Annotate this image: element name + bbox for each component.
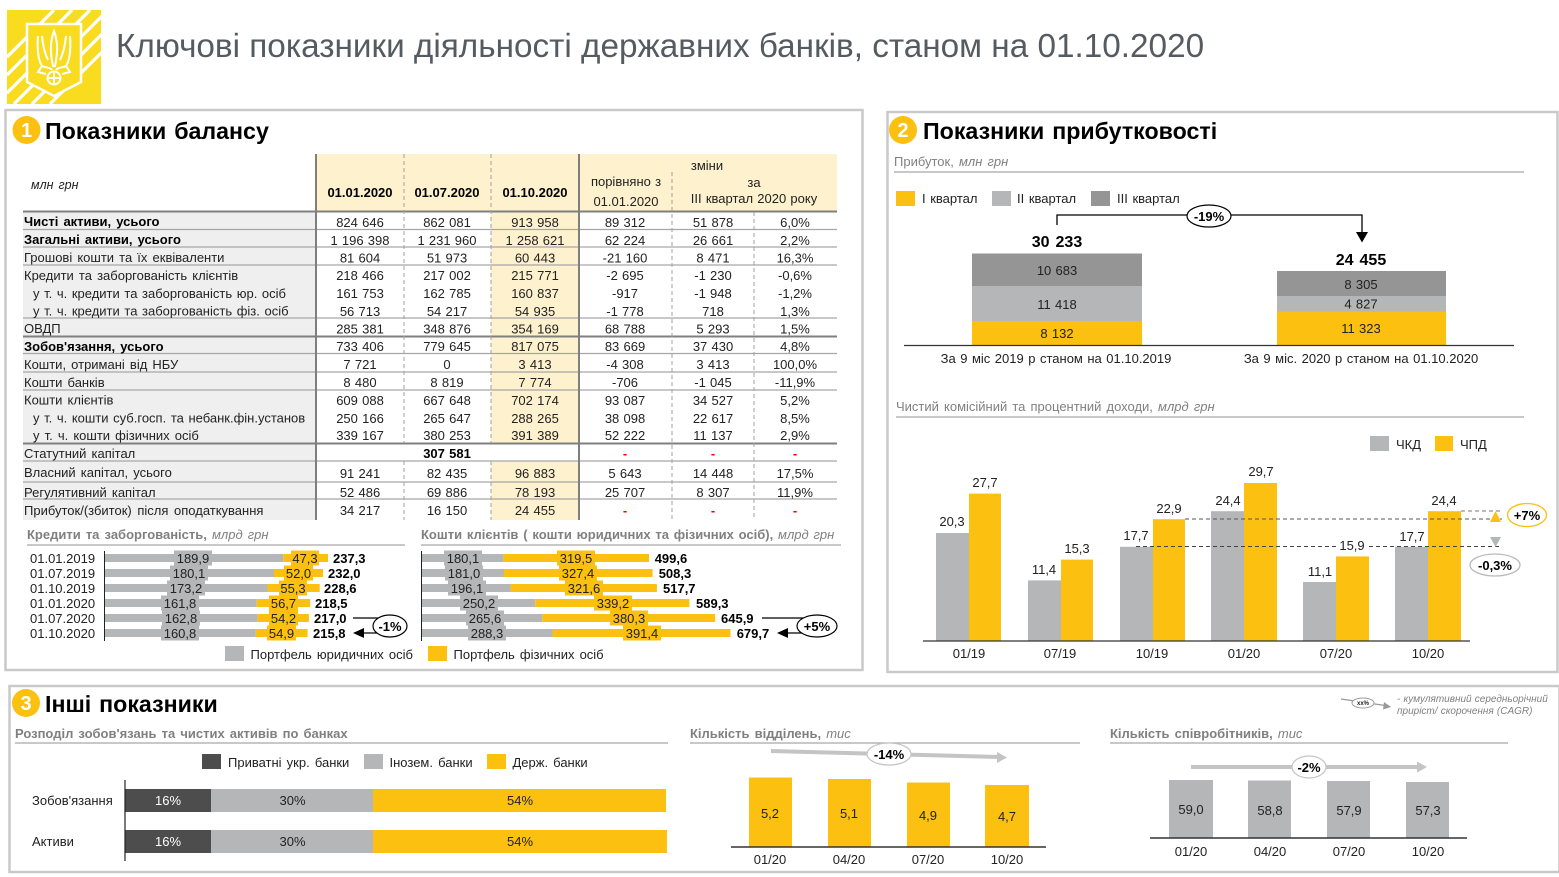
chart: loans bars: 54,2 [271,611,296,626]
chart: employees: 57,3 [1415,803,1441,818]
row: NBU funds: 0 [443,357,451,372]
row: cash: -21 160 [603,250,647,266]
chart: branches: 5,2 [761,806,779,821]
chart: loans bars: 218,5 [315,596,348,611]
row: government bonds: ОВДП [24,321,61,336]
row: net profit: - [793,503,797,518]
row: equity: 82 435 [427,466,467,481]
chart: branches [690,726,1080,867]
row: total assets: 62 224 [605,233,645,248]
axis labels: profit periods: За 9 міс 2019 р станом на 01.10.2019 [941,351,1171,366]
legend: income [1370,436,1487,452]
table header: 01.10.2020 [502,185,568,200]
arrow: -2% [1191,756,1427,778]
row: client funds: 34 527 [693,393,733,408]
row: net profit: 34 217 [340,503,380,518]
row: total assets: 26 661 [693,233,733,248]
row: net assets: 51 878 [693,215,733,230]
row: total assets: 1 258 621 [505,233,565,248]
chart: loans bars: 01.10.2020 [30,626,95,641]
row: business funds: 8,5% [780,411,810,426]
chart: employees: 07/20 [1333,844,1365,859]
chart: loans bars: 161,8 [164,596,196,611]
chart: loans bars: 01.01.2020 [30,596,95,611]
legend: portfolios [225,646,604,662]
row: net profit: - [711,503,715,518]
row: government bonds: 348 876 [423,322,471,336]
chart: distribution by banks: 54% [507,793,533,808]
row: NBU funds: -4 308 [606,357,644,372]
note: CAGR: xx% [1357,701,1370,707]
chart: distribution by banks: 16% [155,793,181,808]
row: bank funds: 8 819 [430,375,464,390]
row: equity: 5 643 [608,466,642,481]
chart: client funds bars: 319,5 [560,551,592,566]
chart: loans bars: 189,9 [177,551,209,566]
row: equity [24,465,814,481]
stacked bar: 2019 profit: 10 683 [1037,263,1077,278]
row: individual funds [33,428,810,443]
row: total assets: 2,2% [780,233,810,248]
row: liabilities: 37 430 [693,339,733,354]
table header: порівняно з [591,174,661,189]
row: NBU funds: Кошти, отримані від НБУ [24,357,179,372]
legend: quarters: І квартал [922,191,977,206]
row: individual funds: 52 222 [605,428,645,443]
callout: +7%: +7% [1514,508,1541,523]
row: regulatory capital: 11,9% [777,485,813,500]
chart: branches: 01/20 [754,852,786,867]
row: total assets [24,232,810,248]
row: charter capital: - [793,446,797,461]
row: corporate loans: -917 [612,286,638,301]
chart: loans bars: 01.01.2019 [30,551,95,566]
row: bank funds: -11,9% [775,375,816,390]
row: cash: 16,3% [777,250,814,266]
arrow: -14% [771,743,1007,765]
row: liabilities [24,339,810,354]
chart: loans bars: 228,6 [324,581,357,596]
row: liabilities: 817 075 [511,339,559,354]
chart: branches: 10/20 [991,852,1023,867]
chart: loans bars: 232,0 [328,566,361,581]
bar chart: income: 29,7 [1248,464,1274,479]
bar chart: income: 15,3 [1064,541,1090,556]
chart: client funds bars: 679,7 [737,626,769,641]
heading: balance indicators: 1 [21,120,32,142]
row: loans: -0,6% [778,268,812,283]
row: charter capital: - [623,446,627,461]
row: bank funds: 7 774 [518,375,552,390]
stacked bar: 2020 profit: 8 305 [1344,277,1378,292]
row: individual funds: у т. ч. кошти фізичних осіб [33,428,199,443]
row: individual funds: 339 167 [336,428,384,443]
bar chart: income: 01/20 [1228,646,1260,661]
stacked bar: 2020 profit: 24 455 [1336,252,1386,269]
bar chart: income: 10/19 [1136,646,1168,661]
legend: bank types [202,754,588,770]
row: bank funds: 8 480 [343,375,377,390]
row: bank funds: Кошти банків [24,375,105,390]
row: charter capital: Статутний капітал [24,446,135,461]
legend: bank types: Інозем. банки [390,755,473,770]
stacked bar: 2019 profit [972,234,1142,346]
row: corporate loans: 162 785 [423,286,471,301]
row: retail loans: 54 217 [427,304,467,319]
chart: loans bars: 56,7 [271,596,296,611]
chart: client funds bars: 321,6 [568,581,600,596]
chart: employees: Кількість співробітників, тис [1110,726,1303,741]
chart: distribution by banks: Розподіл зобов'язань та чистих активів по банках [15,726,348,741]
row: individual funds: 11 137 [693,428,733,443]
row: corporate loans: -1 948 [694,286,732,301]
bar chart: income: 01/19 [953,646,985,661]
row: liabilities: 83 669 [605,339,645,354]
stacked bar: 2019 profit: 11 418 [1037,297,1077,312]
callout: +5% arrow [762,615,837,638]
row: net profit: 16 150 [427,503,467,518]
row: loans [24,268,812,283]
bar chart: income: 17,7 [1399,529,1425,544]
row: regulatory capital: 25 707 [605,485,645,500]
row: business funds: 288 265 [511,411,559,426]
row: loans: -2 695 [606,268,644,283]
row: corporate loans: у т. ч. кредити та заборгованість юр. осіб [33,286,286,301]
bar chart: income: 10/20 [1412,646,1444,661]
axis labels: profit periods [941,351,1478,366]
row: cash: 8 471 [696,250,730,266]
chart: distribution by banks: 16% [155,834,181,849]
bar chart: income [923,464,1470,661]
heading: profitability: Показники прибутковості [923,118,1217,144]
chart: client funds bars [421,527,841,641]
legend: income: ЧКД [1396,437,1421,452]
row: loans: -1 230 [694,268,732,283]
chart: client funds bars: 196,1 [451,581,483,596]
legend: portfolios: Портфель фізичних осіб [454,647,604,662]
row: NBU funds [24,357,817,372]
chart: employees: 57,9 [1336,803,1362,818]
note: CAGR [1341,694,1548,717]
bar chart: income: 22,9 [1156,501,1182,516]
heading: profitability: 2 [897,120,909,142]
row: total assets: 1 231 960 [417,233,477,248]
row: client funds: Кошти клієнтів [24,392,114,408]
callout: +5% arrow: +5% [804,619,831,634]
bar chart: income: 11,4 [1032,562,1056,577]
row: regulatory capital [24,485,813,500]
row: retail loans [33,304,810,319]
heading: other indicators: Інші показники [45,691,218,717]
row: individual funds: 2,9% [780,428,810,443]
bar chart: income: 20,3 [939,514,965,529]
stacked bar: 2020 profit [1277,252,1446,346]
arrow: -19% profit change: -19% [1194,209,1225,224]
row: government bonds: 354 169 [511,322,559,336]
chart: loans bars: 162,8 [165,611,197,626]
row: retail loans: 56 713 [340,304,380,319]
chart: client funds bars: 517,7 [663,581,696,596]
table header: за [747,175,761,190]
chart: branches: 5,1 [840,806,858,821]
logo: trident emblem [7,10,108,104]
row: net profit: - [623,503,627,518]
panel: other indicators [10,686,1559,872]
chart: loans bars: 215,8 [313,626,346,641]
chart: client funds bars: 180,1 [447,551,479,566]
heading: balance indicators: Показники балансу [45,118,269,144]
callout: -1% arrow [353,615,407,638]
callout: -0,3%: -0,3% [1478,558,1512,573]
bar chart: income: 27,7 [972,475,998,490]
row: government bonds: 1,5% [780,322,810,336]
row: corporate loans: -1,2% [778,286,812,301]
row: equity: 14 448 [693,466,733,481]
row: NBU funds: 100,0% [773,357,817,372]
row: individual funds: 380 253 [423,428,471,443]
row: business funds: 250 166 [336,411,384,426]
row: retail loans: 54 935 [515,304,555,319]
chart: client funds bars: 181,0 [448,566,480,581]
table header: 01.01.2020 [593,194,659,209]
reference lines [1136,511,1502,546]
chart: loans bars: 01.07.2019 [30,566,95,581]
row: liabilities: 733 406 [336,339,384,354]
chart: loans bars: 47,3 [292,551,318,566]
row: liabilities: 779 645 [423,339,471,354]
row: total assets: 1 196 398 [330,233,390,248]
row: equity: 91 241 [340,466,380,481]
row: net assets: 89 312 [605,215,645,230]
chart: branches: Кількість відділень, тис [690,726,851,741]
panel: profitability [888,112,1558,672]
chart: employees: 01/20 [1175,844,1207,859]
row: equity: Власний капітал, усього [24,465,172,480]
row: cash: Грошові кошти та їх еквіваленти [24,250,224,265]
row: regulatory capital: 69 886 [427,485,467,500]
row: cash: 60 443 [515,250,555,266]
row: cash: 81 604 [340,250,380,266]
stacked bar: 2020 profit: 11 323 [1341,321,1381,336]
row: net profit: 24 455 [515,503,555,518]
row: loans: 215 771 [511,268,559,283]
row: NBU funds: 7 721 [343,357,377,372]
chart: loans bars [27,527,407,641]
panel: balance indicators [6,110,862,670]
chart: client funds bars: 391,4 [626,626,658,641]
bar chart: income: 17,7 [1123,528,1149,543]
callout: -0,3% [1470,537,1520,576]
table header: 01.07.2020 [414,185,480,200]
row: business funds [33,410,810,426]
chart: client funds bars: 380,3 [613,611,645,626]
row: NBU funds: 3 413 [696,357,730,372]
row: client funds [24,392,810,408]
stacked bar: 2019 profit: 30 233 [1032,234,1082,251]
chart: employees: 10/20 [1412,844,1444,859]
note: CAGR: приріст/ скорочення (CAGR) [1397,706,1532,717]
title: Ключові показники діяльності державних банків, станом на 01.10.2020 [116,28,1204,65]
chart: loans bars: 52,0 [286,566,311,581]
chart: client funds bars: 250,2 [463,596,495,611]
row: net assets: 862 081 [423,215,471,230]
row: client funds: 5,2% [780,393,810,408]
subheading: fee and interest income: Чистий комісійний та процентний доходи, млрд грн [896,399,1215,414]
chart: client funds bars: Кошти клієнтів ( кошти юридичних та фізичних осіб), млрд грн [421,527,834,542]
row: government bonds: 285 381 [336,322,384,336]
row: bank funds: -1 045 [694,375,732,390]
bar chart: income: 07/19 [1044,646,1076,661]
row: individual funds: 391 389 [511,428,559,443]
arrow: -2%: -2% [1297,760,1321,775]
legend: portfolios: Портфель юридичних осіб [250,647,413,662]
bar chart: income: 24,4 [1215,493,1241,508]
chart: branches: 07/20 [912,852,944,867]
chart: loans bars: 173,2 [170,581,202,596]
row: charter capital [24,446,797,461]
chart: loans bars: 160,8 [164,626,196,641]
arrow: -14%: -14% [874,747,905,762]
row: client funds: 93 087 [605,393,645,408]
table header [31,158,818,209]
row: net assets: Чисті активи, усього [24,214,160,229]
row: cash [24,250,814,266]
row: bank funds [24,375,816,390]
row: net assets [24,214,810,230]
row: government bonds [24,321,810,336]
row: total assets: Загальні активи, усього [24,232,181,247]
chart: distribution by banks: Активи [32,834,74,849]
chart: loans bars: Кредити та заборгованість, млрд грн [27,527,269,542]
row: corporate loans: 160 837 [511,286,559,301]
legend: income: ЧПД [1460,437,1487,452]
legend: quarters: ІІ квартал [1017,191,1076,206]
table header: млн грн [31,178,79,192]
row: corporate loans [33,286,812,301]
table header: 01.01.2020 [327,185,393,200]
row: business funds: у т. ч. кошти суб.госп. та небанк.фін.установ [33,410,305,426]
chart: distribution by banks: 30% [279,834,306,849]
chart: branches: 4,9 [919,808,937,823]
row: charter capital: 307 581 [423,446,471,461]
chart: distribution by banks: 54% [507,834,533,849]
row: retail loans: 718 [702,304,724,319]
legend: bank types: Держ. банки [512,755,588,770]
row: regulatory capital: 8 307 [696,485,730,500]
chart: loans bars: 55,3 [280,581,306,596]
bar chart: income: 07/20 [1320,646,1352,661]
row: loans: 218 466 [336,268,384,283]
row: loans: 217 002 [423,268,471,283]
row: NBU funds: 3 413 [518,357,552,372]
callout: -1% arrow: -1% [378,619,402,634]
row: retail loans: -1 778 [606,304,644,319]
stacked bar: 2019 profit: 8 132 [1040,326,1074,341]
chart: client funds bars: 339,2 [597,596,629,611]
chart: client funds bars: 508,3 [659,566,691,581]
row: net profit: Прибуток/(збиток) після оподаткування [24,503,263,518]
row: liabilities: 4,8% [780,339,810,354]
row: net profit [24,503,797,518]
row: business funds: 38 098 [605,411,645,426]
row: cash: 51 973 [427,250,467,266]
note: CAGR: - кумулятивний середньорічний [1397,694,1548,705]
heading: other indicators: 3 [20,693,32,715]
chart: distribution by banks: 30% [279,793,306,808]
chart: loans bars: 217,0 [314,611,347,626]
chart: distribution by banks [15,726,668,861]
row: net assets: 6,0% [780,215,810,230]
row: client funds: 667 648 [423,393,471,408]
row: loans: Кредити та заборгованість клієнтів [24,268,238,283]
chart: distribution by banks: Зобов'язання [32,793,113,808]
chart: loans bars: 01.07.2020 [30,611,95,626]
arrow: -19% profit change [1057,205,1368,242]
legend: quarters: ІІІ квартал [1117,191,1180,206]
chart: loans bars: 237,3 [333,551,366,566]
row: business funds: 22 617 [693,411,733,426]
row: regulatory capital: 78 193 [515,485,555,500]
row: equity: 17,5% [777,466,814,481]
table header: зміни [691,158,723,173]
chart: client funds bars: 327,4 [562,566,594,581]
chart: client funds bars: 288,3 [471,626,503,641]
row: net assets: 913 958 [511,215,559,230]
axis labels: profit periods: За 9 міс. 2020 р станом на 01.10.2020 [1244,351,1478,366]
bar chart: income: 11,1 [1308,564,1332,579]
chart: client funds bars: 499,6 [655,551,687,566]
chart: loans bars: 01.10.2019 [30,581,95,596]
row: corporate loans: 161 753 [336,286,384,301]
chart: employees: 04/20 [1254,844,1286,859]
row: government bonds: 68 788 [605,322,645,336]
row: client funds: 609 088 [336,393,384,408]
table header: ІІІ квартал 2020 року [691,191,818,206]
row: liabilities: Зобов'язання, усього [24,339,164,354]
chart: client funds bars: 265,6 [469,611,501,626]
chart: employees: 58,8 [1257,803,1283,818]
stacked bar: 2020 profit: 4 827 [1344,296,1378,312]
row: business funds: 265 647 [423,411,471,426]
chart: client funds bars: 589,3 [696,596,729,611]
row: regulatory capital: Регулятивний капітал [24,485,156,500]
legend: bank types: Приватні укр. банки [228,755,349,770]
row: retail loans: 1,3% [780,304,810,319]
chart: branches: 04/20 [833,852,865,867]
chart: employees: 59,0 [1178,802,1204,817]
chart: client funds bars: 645,9 [721,611,754,626]
subheading: profit: Прибуток, млн грн [894,154,1008,169]
row: client funds: 702 174 [511,393,559,408]
row: bank funds: -706 [612,375,638,390]
balance table [23,154,837,520]
callout: +7% [1490,504,1546,526]
legend: quarters [896,191,1180,206]
row: retail loans: у т. ч. кредити та заборгованість фіз. осіб [33,304,289,318]
row: equity: 96 883 [515,466,555,481]
chart: branches: 4,7 [998,809,1016,824]
bar chart: income: 24,4 [1431,493,1457,508]
chart: employees [1110,726,1508,859]
row: regulatory capital: 52 486 [340,485,380,500]
chart: loans bars: 180,1 [173,566,205,581]
row: charter capital: - [711,446,715,461]
bar chart: income: 15,9 [1339,538,1365,553]
chart: loans bars: 54,9 [269,626,294,641]
row: government bonds: 5 293 [696,322,730,336]
row: net assets: 824 646 [336,215,384,230]
